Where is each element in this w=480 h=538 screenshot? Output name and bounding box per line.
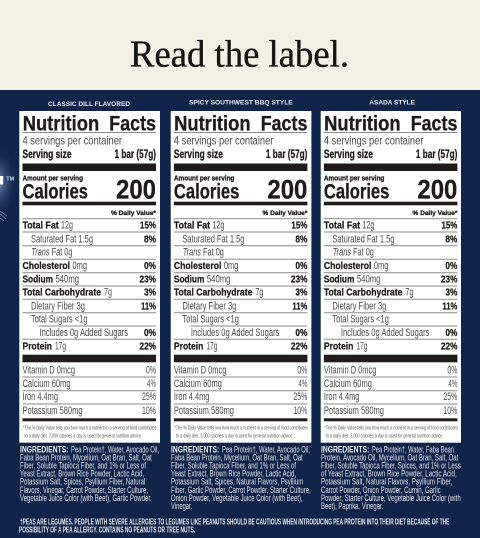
row: calcium: 4% — [448, 378, 458, 390]
ingredients: classic dill: Fiber, Soluble Tapioca Fiber, and 1% or Less of — [20, 460, 146, 470]
footnote — [23, 425, 157, 440]
row: total sugars: Total Sugars <1g — [182, 314, 239, 326]
row: iron — [174, 391, 308, 403]
panel: nutrition label spicy southwest — [171, 111, 311, 443]
row: calcium: 4% — [147, 378, 156, 390]
daily value: % Daily Value* — [111, 210, 156, 217]
row: protein: 17g — [356, 340, 367, 352]
label heading — [174, 113, 307, 136]
row: cholesterol — [174, 260, 307, 272]
row: total fat — [22, 220, 156, 232]
row: sodium — [22, 273, 156, 285]
ingredients: classic dill: INGREDIENTS: — [20, 444, 69, 454]
ingredients: spicy southwest: INGREDIENTS: — [171, 444, 219, 454]
row: total carbohydrate — [174, 287, 307, 299]
row: potassium: Potassium 580mg — [324, 405, 384, 417]
ingredients: classic dill: Vegetable Juice Color (with Beet), Garlic Powder. — [20, 493, 152, 503]
label heading: Facts — [109, 113, 156, 136]
row: protein: Protein — [324, 341, 353, 352]
row: iron: Iron 4.4mg — [324, 391, 359, 403]
row: potassium: Potassium 580mg — [174, 405, 234, 417]
row: saturated fat: Saturated Fat 1.5g — [182, 233, 244, 245]
row: protein: Protein — [174, 341, 203, 352]
row: total fat: 15% — [441, 221, 457, 232]
label heading — [23, 113, 156, 136]
amount per serving: Amount per serving — [22, 174, 83, 182]
serving size — [174, 147, 307, 161]
row: cholesterol: Cholesterol — [22, 261, 70, 272]
row: protein: 17g — [55, 340, 66, 352]
footnote: *The % Daily Value tells you how much a nutrient in a serving of food contributes — [23, 425, 157, 431]
row: sodium: 540mg — [357, 273, 380, 285]
row: iron: Iron 4.4mg — [22, 391, 58, 403]
row: iron — [22, 391, 156, 403]
row: total fat: Total Fat — [22, 221, 59, 232]
row: dietary fiber — [182, 300, 307, 312]
row: sodium: Sodium — [324, 274, 354, 285]
row: total sugars: Total Sugars <1g — [332, 314, 389, 326]
row: total carbohydrate — [324, 287, 457, 299]
row: potassium — [324, 405, 458, 417]
ingredients: asada — [321, 444, 461, 511]
row: sodium: Sodium — [22, 274, 53, 285]
row: saturated fat: Saturated Fat 1.5g — [31, 233, 93, 245]
row: iron — [324, 391, 458, 403]
row: protein — [174, 340, 307, 352]
ingredients: spicy southwest: Vinegar. — [171, 501, 192, 511]
row: added sugars: Includes 0g Added Sugars — [191, 327, 280, 339]
row: total fat — [324, 220, 457, 232]
footnote: to a daily diet. 2,000 calories a day is used for general nutrition advice. — [24, 434, 142, 440]
row: sodium: 23% — [140, 274, 156, 285]
row: cholesterol: Cholesterol — [324, 261, 371, 272]
serving size: Serving size — [174, 147, 223, 161]
row: protein: 22% — [291, 341, 307, 352]
row: cholesterol: Cholesterol — [174, 261, 221, 272]
row: sodium: 23% — [441, 274, 457, 285]
row: saturated fat: 8% — [295, 234, 307, 245]
row: dietary fiber — [332, 300, 457, 312]
row: calcium: Calcium 60mg — [22, 378, 70, 390]
row: total carbohydrate — [22, 287, 156, 299]
serving size: 1 bar (57g) — [416, 147, 457, 161]
row: dietary fiber: 11% — [442, 301, 457, 312]
row: total sugars: Total Sugars <1g — [31, 314, 88, 326]
row: dietary fiber: 11% — [292, 301, 307, 312]
row: total carbohydrate: Total Carbohydrate — [324, 288, 403, 299]
ingredients: spicy southwest: Onion Powder, Vegetable Juice Color (with Beet), — [171, 493, 303, 503]
calories: Calories — [174, 180, 239, 204]
row: dietary fiber: Dietary Fiber 3g — [182, 300, 236, 312]
serving size: Serving size — [22, 147, 72, 161]
row: total fat: 15% — [291, 221, 307, 232]
serving size: Serving size — [324, 147, 373, 161]
row: iron: 25% — [142, 391, 156, 403]
ingredients: spicy southwest: Faba Bean Protein, Mycelium, Oat Bran, Salt, Oat — [171, 452, 303, 462]
row: total fat: 12g — [362, 220, 374, 232]
row: sodium — [324, 273, 457, 285]
ingredients: classic dill: Yeast Extract, Brown Rice Powder, Lactic Acid, — [20, 469, 144, 479]
row: iron: 25% — [293, 391, 308, 403]
row: total carbohydrate: Total Carbohydrate — [174, 288, 253, 299]
row: vitamin d: Vitamin D 0mcg — [324, 364, 376, 376]
row: cholesterol: 0mg — [72, 260, 87, 272]
row: potassium: 10% — [142, 405, 156, 417]
ingredients: spicy southwest: Pea Protein†, Water, Avocado Oil, — [222, 444, 310, 454]
row: total fat: Total Fat — [174, 221, 211, 232]
icon: glowing logo edge — [0, 145, 20, 221]
row: total carbohydrate: 7g — [405, 287, 413, 299]
row: added sugars: Includes 0g Added Sugars — [341, 327, 430, 339]
label heading: Facts — [411, 113, 457, 136]
row: total carbohydrate: 7g — [104, 287, 112, 299]
row: vitamin d: Vitamin D 0mcg — [174, 364, 226, 376]
row: calcium: Calcium 60mg — [174, 378, 222, 390]
row: sodium: 540mg — [207, 273, 230, 285]
ingredients: spicy southwest: Fiber, Garlic Powder, Carrot Powder, Starter Culture, — [171, 485, 311, 495]
servings: 4 servings per container — [22, 134, 122, 148]
ingredients: spicy southwest: Fiber, Soluble Tapioca Fiber, and 1% or Less of — [171, 460, 296, 470]
row: iron: Iron 4.4mg — [174, 391, 209, 403]
row: dietary fiber — [31, 300, 156, 312]
row: cholesterol: 0% — [445, 261, 457, 272]
row: trans fat: Trans Fat 0g — [333, 247, 374, 259]
row: vitamin d — [324, 364, 458, 376]
ingredients: classic dill: Pea Protein†, Water, Avocado Oil, — [71, 444, 159, 454]
calories: Calories — [324, 180, 389, 204]
row: sodium: 540mg — [56, 273, 79, 285]
row: potassium: 10% — [443, 405, 458, 417]
calories — [174, 175, 307, 205]
serving size — [22, 147, 156, 161]
row: cholesterol: 0mg — [224, 260, 238, 272]
row: cholesterol: 0% — [144, 261, 156, 272]
calories — [324, 175, 457, 205]
row: total fat — [174, 220, 307, 232]
row: vitamin d: Vitamin D 0mcg — [22, 364, 75, 376]
row: potassium — [174, 405, 308, 417]
label heading: Nutrition — [324, 113, 401, 136]
label heading: Facts — [261, 113, 307, 136]
row: trans fat: Trans Fat 0g — [31, 247, 72, 259]
row: total fat: 12g — [61, 220, 73, 232]
row: added sugars: 0% — [445, 328, 457, 339]
row: vitamin d — [22, 364, 156, 376]
row: saturated fat: Saturated Fat 1.5g — [332, 233, 394, 245]
label heading: Nutrition — [174, 113, 251, 136]
row: saturated fat: 8% — [445, 234, 457, 245]
row: calcium — [22, 378, 156, 390]
row: added sugars: 0% — [144, 328, 156, 339]
allergy disclaimer — [19, 517, 450, 535]
row: potassium — [22, 405, 156, 417]
servings: 4 servings per container — [174, 134, 273, 148]
row: added sugars: Includes 0g Added Sugars — [40, 327, 128, 339]
row: trans fat: Trans Fat 0g — [183, 247, 224, 259]
row: calcium — [324, 378, 458, 390]
ingredients: asada: INGREDIENTS: — [321, 444, 369, 454]
heading: spicy southwest: SPICY SOUTHWEST BBQ STYLE — [189, 99, 293, 106]
row: calcium: 4% — [298, 378, 308, 390]
serving size — [324, 147, 457, 161]
icon: glowing logo edge: TM — [6, 176, 15, 182]
servings: 4 servings per container — [324, 134, 423, 148]
ingredients: spicy southwest — [171, 444, 311, 511]
row: potassium: 10% — [293, 405, 308, 417]
daily value: % Daily Value* — [262, 210, 308, 217]
calories: 200 — [116, 175, 156, 205]
title: Read the label. — [130, 34, 349, 76]
ingredients: classic dill: Faba Bean Protein, Mycelium, Oat Bran, Salt, Oat — [20, 452, 152, 462]
row: iron: 25% — [443, 391, 458, 403]
calories: Calories — [22, 180, 88, 204]
calories: 200 — [417, 175, 457, 205]
row: cholesterol — [22, 260, 156, 272]
row: vitamin d — [174, 364, 308, 376]
row: vitamin d: 0% — [297, 364, 308, 376]
row: sodium: 23% — [291, 274, 307, 285]
row: protein: 17g — [206, 340, 217, 352]
row: total carbohydrate: 7g — [255, 287, 263, 299]
amount per serving: Amount per serving — [324, 174, 384, 182]
serving size: 1 bar (57g) — [114, 147, 156, 161]
heading: asada: ASADA STYLE — [369, 99, 415, 106]
row: total fat: 12g — [212, 220, 224, 232]
footnote — [174, 425, 308, 440]
row: dietary fiber: Dietary Fiber 3g — [332, 300, 386, 312]
row: saturated fat: 8% — [144, 234, 156, 245]
ingredients: asada: Beet), Paprika, Vinegar. — [321, 501, 383, 511]
row: protein: 22% — [441, 341, 457, 352]
panel: nutrition label asada — [321, 111, 461, 443]
daily value: % Daily Value* — [412, 210, 458, 217]
calories: 200 — [267, 175, 307, 205]
footnote: *The % Daily Value tells you how much a nutrient in a serving of food contributes — [174, 425, 308, 431]
row: total fat: 15% — [140, 221, 156, 232]
row: cholesterol: 0% — [295, 261, 307, 272]
label heading: Nutrition — [23, 113, 99, 136]
amount per serving: Amount per serving — [174, 174, 234, 182]
row: dietary fiber: Dietary Fiber 3g — [31, 300, 85, 312]
ingredients: spicy southwest: Potassium Salt, Spices, Natural Flavors, Psyllium — [171, 477, 303, 487]
calories — [22, 175, 156, 205]
ingredients: classic dill: Flavors, Vinegar, Carrot Powder, Starter Culture, — [20, 485, 148, 495]
row: protein — [324, 340, 457, 352]
row: sodium: Sodium — [174, 274, 204, 285]
row: cholesterol — [324, 260, 457, 272]
row: total carbohydrate: 3% — [144, 288, 156, 299]
row: total carbohydrate: 3% — [445, 288, 457, 299]
row: total carbohydrate: Total Carbohydrate — [22, 288, 101, 299]
row: vitamin d: 0% — [146, 364, 156, 376]
row: potassium: Potassium 580mg — [22, 405, 82, 417]
row: protein: 22% — [140, 341, 156, 352]
row: vitamin d: 0% — [447, 364, 458, 376]
row: protein: Protein — [22, 341, 52, 352]
row: calcium — [174, 378, 308, 390]
footnote: to a daily diet. 2,000 calories a day is used for general nutrition advice. — [176, 434, 293, 440]
label heading — [324, 113, 457, 136]
row: added sugars: 0% — [295, 328, 307, 339]
row: dietary fiber: 11% — [141, 301, 156, 312]
footnote — [324, 425, 458, 440]
row: cholesterol: 0mg — [374, 260, 388, 272]
ingredients: classic dill: Potassium Salt, Spices, Psyllium Fiber, Natural — [20, 477, 145, 487]
row: total fat: Total Fat — [324, 221, 361, 232]
panel: nutrition label classic dill — [19, 111, 160, 443]
row: sodium — [174, 273, 307, 285]
row: calcium: Calcium 60mg — [324, 378, 372, 390]
ingredients: classic dill — [20, 444, 159, 503]
ingredients: spicy southwest: Yeast Extract, Brown Rice Powder, Lactic Acid, — [171, 469, 296, 479]
heading: classic dill: CLASSIC DILL FLAVORED — [48, 101, 130, 108]
row: total carbohydrate: 3% — [295, 288, 307, 299]
serving size: 1 bar (57g) — [266, 147, 307, 161]
row: protein — [22, 340, 156, 352]
allergy disclaimer: POSSIBILITY OF A PEA ALLERGY. CONTAINS NO PEANUTS OR TREE NUTS. — [19, 526, 195, 535]
